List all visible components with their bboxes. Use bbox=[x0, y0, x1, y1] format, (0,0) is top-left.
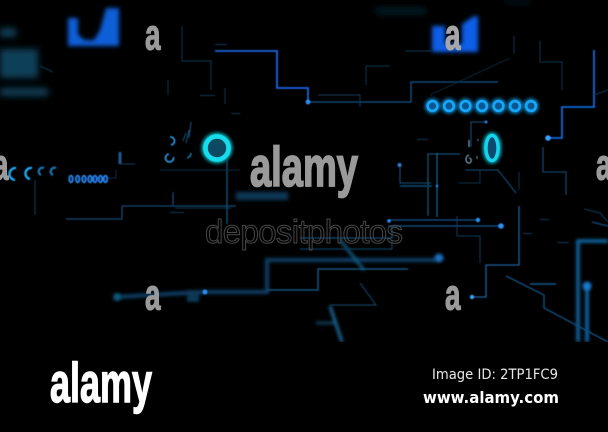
small gauges beside big ring bbox=[166, 122, 191, 162]
circuit node: upper centre bbox=[306, 100, 310, 104]
footer text: image id: Image ID: 2TP1FC9 bbox=[432, 367, 558, 383]
glowing node: lower left bbox=[203, 290, 207, 294]
big cyan ring bbox=[206, 136, 228, 160]
blurred panels: left data blocks bbox=[0, 28, 48, 96]
diagonal trace: lower right bbox=[506, 209, 608, 342]
circuit node: upper right bbox=[545, 135, 551, 141]
cyan diagonal traces bbox=[316, 240, 364, 342]
blurred node: lower right bbox=[582, 282, 592, 290]
trace: lower right stepped bbox=[472, 206, 519, 297]
ring row: seven glowing circles bbox=[428, 101, 536, 111]
blurred panels: top faint bars bbox=[376, 0, 530, 14]
circuit trace: lower left bbox=[66, 192, 236, 219]
watermark: depositphotos: depositphotos bbox=[205, 213, 403, 250]
footer text: website: www.alamy.com bbox=[423, 388, 559, 407]
blurred panel: top centre blue chart bbox=[432, 16, 478, 52]
footer logo: alamy: alamy bbox=[50, 351, 152, 414]
traces around ellipse ring bbox=[400, 122, 566, 217]
circuit trace: upper centre bbox=[308, 82, 498, 107]
watermark: small a bottom right: a bbox=[445, 270, 461, 320]
blurred thick trace: lower centre bbox=[117, 260, 436, 302]
traces: centre right horizontal bbox=[300, 216, 500, 263]
blurred panel: top left blue chart bbox=[68, 8, 119, 46]
circuit trace: bright upper left bbox=[215, 51, 308, 102]
circuit nodes: around ellipse ring bbox=[398, 120, 488, 187]
thin trace: z shape bbox=[330, 283, 376, 305]
thin traces: upper region bbox=[40, 26, 608, 104]
trace: lower centre second level bbox=[267, 269, 408, 310]
circuit trace: bright upper right bbox=[548, 50, 594, 138]
small gauges beside ellipse ring bbox=[466, 139, 478, 163]
watermark: small a top right: a bbox=[445, 10, 461, 60]
blurred node: lower left end bbox=[113, 293, 121, 301]
watermark: centre alamy: alamy bbox=[250, 135, 358, 198]
bottom footer band bbox=[0, 342, 608, 432]
vertical trace below big ring bbox=[160, 160, 240, 224]
small blue oval row bbox=[69, 176, 108, 182]
glowing node: lower centre bbox=[434, 254, 444, 262]
blurred bracket: lower right bbox=[578, 241, 608, 342]
left rings row bbox=[9, 168, 56, 180]
cyan ellipse ring bbox=[486, 136, 498, 160]
blurred patch right of vertical trace bbox=[236, 192, 288, 200]
circuit nodes: centre right bbox=[387, 218, 504, 229]
watermark: small a top left: a bbox=[145, 10, 161, 60]
watermark: small a bottom left: a bbox=[145, 270, 161, 320]
circuit node: lower right stepped bbox=[470, 295, 474, 299]
faint data ticks bbox=[170, 44, 569, 243]
small bar near ovals bbox=[35, 152, 135, 215]
